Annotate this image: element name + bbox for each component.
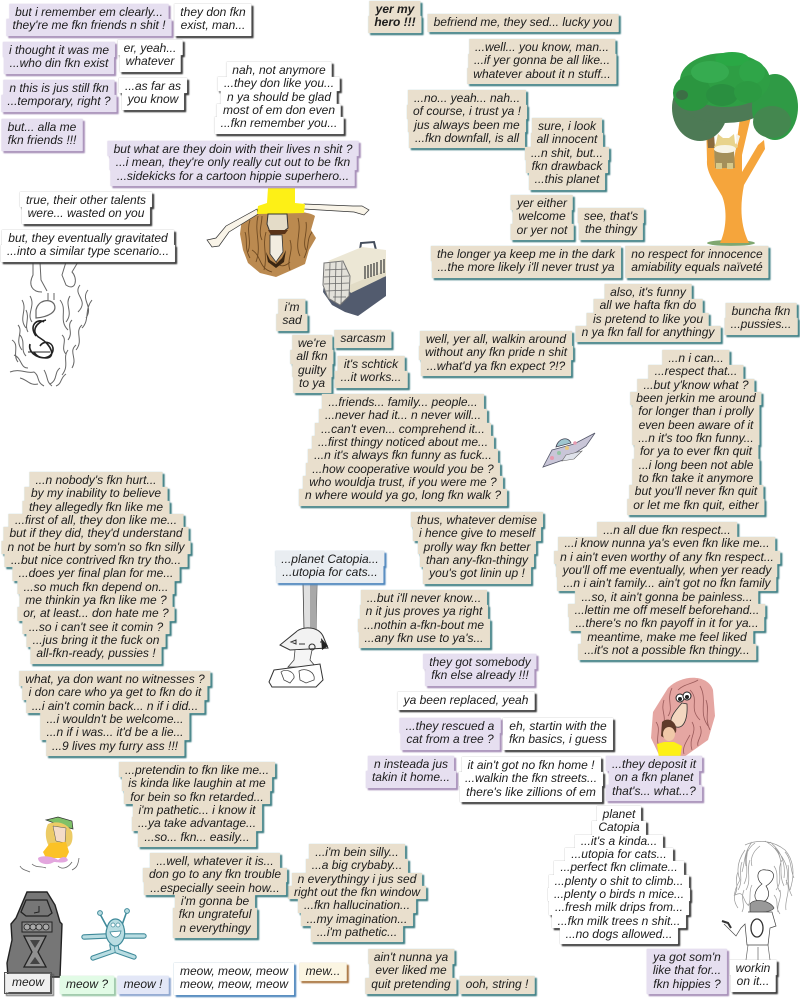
speech: well, whatever it is: fkn ungrateful bbox=[179, 907, 251, 921]
speech: n insteada jus takin it home bbox=[366, 756, 459, 791]
speech: mew: mew... bbox=[306, 964, 340, 978]
speech: but i remember em clearly: they're me fkn friends n shit ! bbox=[12, 18, 166, 32]
speech: friends family people: ...how cooperative would you be ? bbox=[312, 462, 494, 476]
speech: planet Catopia description: ...fkn milk trees n shit... bbox=[558, 914, 680, 928]
speech: n this is jus still fkn: n this is jus still fkn bbox=[9, 81, 109, 95]
speech: it ain't got no fkn home: there's like zillions of em bbox=[466, 785, 596, 799]
speech: true, their other talents: were... wasted on you bbox=[28, 206, 144, 220]
icon: flying saucer bbox=[543, 433, 595, 467]
speech: n nobody's fkn hurt: or, at least... don hate me ? bbox=[23, 606, 169, 620]
speech: n nobody's fkn hurt: ...first of all, they don like me... bbox=[15, 513, 177, 527]
speech: planet Catopia description: Catopia bbox=[598, 820, 640, 834]
speech: well, yer all, walkin around: without any fkn pride n shit bbox=[425, 345, 567, 359]
speech: buncha fkn pussies: buncha fkn bbox=[732, 304, 790, 318]
speech: eh, startin with the basics: fkn basics, i guess bbox=[509, 732, 607, 746]
speech: n i can respect that: ...n i can... bbox=[668, 351, 724, 365]
speech: they deposit it on a planet: on a fkn planet bbox=[615, 770, 693, 784]
speech: workin on it bbox=[730, 962, 776, 992]
speech: buncha fkn pussies: ...pussies... bbox=[731, 317, 791, 331]
speech: well, whatever it is bbox=[143, 855, 287, 938]
speech: see, that's the thingy: the thingy bbox=[585, 222, 637, 236]
speech: well, whatever it is: ...well, whatever it is... bbox=[156, 854, 274, 868]
speech: n i can respect that: ...respect that... bbox=[655, 364, 737, 378]
speech: they deposit it on a planet: that's... what...? bbox=[612, 784, 696, 798]
speech: i'm sad: sad bbox=[282, 313, 302, 327]
speech: buncha fkn pussies bbox=[724, 302, 800, 338]
speech: sure, i look all innocent: fkn drawback bbox=[532, 159, 602, 173]
speech: sure, i look all innocent: all innocent bbox=[537, 132, 597, 146]
speech: the longer ya keep me in the dark: ...the more likely i'll never trust ya bbox=[437, 260, 615, 274]
speech: friends family people: ...never had it... n never will... bbox=[325, 408, 481, 422]
speech: as far as you know: ...as far as bbox=[125, 79, 181, 93]
speech: meow meow meow: meow, meow, meow bbox=[180, 977, 288, 991]
speech: well, whatever it is: don go to any fkn trouble bbox=[149, 867, 281, 881]
speech: n nobody's fkn hurt: all-fkn-ready, pussies ! bbox=[36, 646, 156, 660]
speech: they rescued a cat: cat from a tree ? bbox=[406, 732, 494, 746]
speech: planet Catopia description bbox=[548, 808, 690, 944]
speech: n all due fkn respect: ...it's not a possible fkn thingy... bbox=[584, 643, 750, 657]
icon: signpost with saucer base bbox=[269, 583, 328, 687]
speech: meow outlined: meow bbox=[12, 975, 44, 989]
speech: yer either welcome: or yer not bbox=[517, 223, 567, 237]
speech: pretendin to fkn like me: ...so... fkn... easily... bbox=[144, 830, 250, 844]
speech: nah, not anymore: ...they don like you... bbox=[224, 76, 334, 90]
speech: sure, i look all innocent: sure, i look bbox=[538, 119, 596, 133]
speech: we're all fkn guilty to ya: guilty bbox=[298, 363, 326, 377]
speech: n all due fkn respect: meantime, make me feel liked bbox=[587, 630, 747, 644]
speech: er, yeah whatever bbox=[117, 40, 186, 76]
speech: but i'll never know: ...but i'll never know... bbox=[367, 591, 481, 605]
speech: well you know man: ...if yer gonna be all like... bbox=[474, 53, 610, 67]
speech: well you know man: whatever about it n stuff... bbox=[473, 67, 611, 81]
speech: ain't nunna ya ever liked me: quit pretending bbox=[371, 977, 451, 991]
speech: also, it's funny: all we hafta fkn do bbox=[600, 298, 696, 312]
speech: eh, startin with the basics: eh, startin with the bbox=[509, 719, 607, 733]
speech: also, it's funny: also, it's funny bbox=[610, 285, 686, 299]
speech: but i remember em clearly bbox=[6, 4, 174, 39]
speech: sure, i look all innocent: ...n shit, but... bbox=[531, 146, 603, 160]
speech: we're all fkn guilty to ya: to ya bbox=[299, 376, 325, 390]
speech: nah, not anymore bbox=[214, 62, 347, 138]
speech: but i remember em clearly: but i remember em clearly... bbox=[15, 5, 163, 19]
speech: n all due fkn respect: ...n all due fkn respect... bbox=[603, 523, 731, 537]
speech: workin on it: on it... bbox=[737, 974, 769, 988]
speech: yer either welcome: welcome bbox=[518, 209, 566, 223]
speech: n i can respect that: even been aware of it bbox=[639, 418, 753, 432]
speech: n nobody's fkn hurt: ...so i can't see it comin ? bbox=[29, 620, 163, 634]
speech: well, whatever it is: i'm gonna be bbox=[181, 894, 249, 908]
speech: what, ya don want no witnesses bbox=[18, 670, 214, 760]
speech: pretendin to fkn like me: is kinda like laughin at me bbox=[128, 776, 266, 790]
speech: thus, whatever demise: than any-fkn-thingy bbox=[426, 553, 528, 567]
speech: ain't nunna ya ever liked me bbox=[365, 951, 457, 994]
speech: ya got som'n like that: ya got som'n bbox=[653, 950, 721, 964]
speech: no yeah nah: ...fkn downfall, is all bbox=[415, 131, 519, 145]
speech: ya been replaced, yeah: ya been replaced, yeah bbox=[404, 693, 528, 707]
speech: planet Catopia description: ...utopia for cats... bbox=[571, 847, 667, 861]
speech: i'm sad bbox=[276, 298, 310, 334]
speech: n i can respect that: been jerkin me around bbox=[636, 391, 756, 405]
speech: n insteada jus takin it home: n insteada jus bbox=[374, 757, 448, 771]
speech: meow question: meow ? bbox=[66, 977, 108, 991]
speech: no yeah nah: jus always been me bbox=[414, 118, 520, 132]
speech: they got somebody fkn else bbox=[422, 654, 540, 689]
speech: n nobody's fkn hurt: ...so much fkn depend on... bbox=[24, 580, 168, 594]
speech: n all due fkn respect bbox=[554, 522, 784, 664]
speech: i'm bein silly: ...i'm pathetic... bbox=[317, 925, 397, 939]
speech: n nobody's fkn hurt: ...but nice contrived fkn try tho... bbox=[11, 553, 181, 567]
speech: n nobody's fkn hurt: me thinkin ya fkn like me ? bbox=[25, 593, 167, 607]
speech: yer my hero: yer my bbox=[376, 2, 414, 16]
speech: planet Catopia description: ...plenty o shit to climb... bbox=[555, 874, 683, 888]
speech: they got somebody fkn else: fkn else already !!! bbox=[431, 668, 529, 682]
speech: well, yer all, walkin around: ...what'd ya fkn expect ?!? bbox=[427, 359, 565, 373]
speech: nah, not anymore: ...fkn remember you... bbox=[221, 116, 337, 130]
speech: ain't nunna ya ever liked me: ain't nunna ya bbox=[374, 950, 448, 964]
speech: n all due fkn respect: ...so, it ain't gonna be painless... bbox=[581, 590, 753, 604]
icon: upside-down hippie in yellow shirt bbox=[207, 188, 369, 277]
speech: but i'll never know: n it jus proves ya right bbox=[366, 604, 482, 618]
icon: pink-haired creature with small yellow-shirted kid bbox=[651, 678, 715, 758]
speech: but, they eventually gravitated bbox=[0, 230, 178, 266]
speech: it's schtick bbox=[334, 356, 411, 392]
speech: planet Catopia description: ...fresh milk drips from... bbox=[555, 900, 683, 914]
speech: i'm sad: i'm bbox=[285, 300, 299, 314]
speech: planet Catopia description: ...plenty o birds n mice... bbox=[554, 887, 684, 901]
icon: upside-down sketched figure bbox=[10, 262, 92, 386]
speech: n i can respect that: ...but y'know what ? bbox=[643, 378, 749, 392]
speech: i thought it was me: i thought it was me bbox=[9, 43, 109, 57]
speech: n all due fkn respect: ...lettin me off meself beforehand... bbox=[575, 603, 759, 617]
speech: no respect for innocence bbox=[624, 246, 772, 282]
speech: true, their other talents: true, their other talents bbox=[26, 193, 146, 207]
icon: pet carrier crate bbox=[323, 242, 386, 316]
speech: er, yeah whatever: er, yeah... bbox=[124, 41, 176, 55]
speech: no respect for innocence: no respect for innocence bbox=[631, 247, 763, 261]
speech: n nobody's fkn hurt: but if they did, they'd understand bbox=[9, 526, 183, 540]
speech: they deposit it on a planet bbox=[606, 758, 702, 801]
speech: i'm bein silly: n everythingy i jus sed bbox=[298, 872, 416, 886]
icon: blue alien with spread arms bbox=[84, 909, 144, 958]
speech: befriend me, they sed: befriend me, they sed... lucky you bbox=[434, 15, 612, 29]
speech: also, it's funny: is pretend to like you bbox=[593, 312, 703, 326]
icon: tree with cat bbox=[672, 52, 798, 246]
speech: what, ya don want no witnesses: i don care who ya get to fkn do it bbox=[29, 685, 201, 699]
speech: workin on it: workin bbox=[736, 961, 770, 975]
speech: n nobody's fkn hurt: ...jus bring it the fuck on bbox=[33, 633, 159, 647]
speech: well, whatever it is: n everythingy bbox=[179, 921, 251, 935]
sign: planet Catopia bbox=[274, 550, 388, 586]
speech: nah, not anymore: nah, not anymore bbox=[232, 63, 326, 77]
speech: yer my hero: hero !!! bbox=[374, 15, 416, 29]
speech: sure, i look all innocent bbox=[524, 118, 612, 194]
speech: nah, not anymore: n ya should be glad bbox=[227, 90, 331, 104]
speech: but what are they doin: ...sidekicks for a cartoon hippie superhero... bbox=[117, 169, 349, 183]
speech: it ain't got no fkn home: ...walkin the fkn streets... bbox=[465, 771, 597, 785]
speech: but what are they doin bbox=[107, 140, 362, 189]
speech: n nobody's fkn hurt: they allegedly fkn like me bbox=[29, 500, 163, 514]
speech: n i can respect that: but you'll never fkn quit bbox=[635, 484, 757, 498]
speech: but i'll never know: ...any fkn use to ya's... bbox=[364, 631, 484, 645]
speech: they don fkn exist: they don fkn bbox=[180, 5, 246, 19]
speech: the longer ya keep me in the dark bbox=[430, 246, 624, 282]
speech: but alla me fkn friends: fkn friends !!! bbox=[8, 133, 76, 147]
speech: pretendin to fkn like me: i'm pathetic... i know it bbox=[138, 803, 255, 817]
speech: n i can respect that: ...i long been not able bbox=[639, 458, 753, 472]
speech: pretendin to fkn like me bbox=[119, 764, 275, 847]
speech: they don fkn exist: exist, man... bbox=[181, 18, 245, 32]
speech: also, it's funny: n ya fkn fall for anythingy bbox=[582, 325, 714, 339]
speech: it's schtick: ...it works... bbox=[341, 370, 401, 384]
speech: friends family people: ...can't even... comprehend it... bbox=[321, 422, 485, 436]
speech: friends family people: ...n it's always fkn funny as fuck... bbox=[314, 448, 492, 462]
speech: but i'll never know bbox=[358, 590, 494, 652]
speech: pretendin to fkn like me: for bein so fkn retarded... bbox=[130, 790, 264, 804]
speech: the longer ya keep me in the dark: the longer ya keep me in the dark bbox=[437, 247, 615, 261]
speech: what, ya don want no witnesses: ...n if i was... it'd be a lie... bbox=[46, 725, 184, 739]
speech: no respect for innocence: amiability equals naïveté bbox=[631, 260, 763, 274]
speech: they don fkn exist bbox=[174, 4, 254, 40]
speech: thus, whatever demise: i hence give to meself bbox=[419, 526, 535, 540]
speech: sarcasm: sarcasm bbox=[340, 331, 386, 345]
speech: n i can respect that: to fkn take it anymore bbox=[639, 471, 753, 485]
cat in tree bbox=[714, 134, 740, 169]
speech: also, it's funny bbox=[575, 284, 724, 346]
speech: n all due fkn respect: n i ain't even worthy of any fkn respect... bbox=[560, 550, 774, 564]
speech: n i can respect that: for ya to ever fkn quit bbox=[640, 444, 752, 458]
speech: i thought it was me bbox=[2, 42, 118, 77]
speech: n nobody's fkn hurt: n not be hurt by som'n so fkn silly bbox=[7, 540, 185, 554]
speech: planet Catopia description: planet bbox=[603, 807, 635, 821]
speech: thus, whatever demise: prolly way fkn better bbox=[424, 540, 530, 554]
speech: n i can respect that: for longer than i prolly bbox=[638, 404, 754, 418]
speech: planet Catopia description: ...perfect fkn climate... bbox=[560, 860, 678, 874]
speech: n all due fkn respect: ...i know nunna ya's even fkn like me... bbox=[564, 536, 770, 550]
speech: we're all fkn guilty to ya: all fkn bbox=[296, 349, 328, 363]
speech: meow meow meow bbox=[174, 965, 294, 995]
speech: see, that's the thingy: see, that's bbox=[584, 209, 638, 223]
speech: no yeah nah bbox=[406, 90, 530, 152]
sign: planet Catopia: ...utopia for cats... bbox=[282, 565, 378, 579]
speech: i'm bein silly: ...a big crybaby... bbox=[312, 858, 402, 872]
speech: i'm bein silly: ...i'm bein silly... bbox=[315, 845, 399, 859]
speech: we're all fkn guilty to ya bbox=[290, 334, 336, 396]
speech: er, yeah whatever: whatever bbox=[126, 54, 174, 68]
speech: but alla me fkn friends bbox=[1, 118, 86, 154]
speech: nah, not anymore: most of em don even bbox=[223, 103, 335, 117]
speech: n i can respect that bbox=[626, 350, 768, 518]
speech: well, whatever it is: ...especially seein how... bbox=[150, 881, 280, 895]
speech: planet Catopia description: ...it's a kinda... bbox=[581, 834, 657, 848]
speech: i'm bein silly: right out the fkn window bbox=[294, 885, 420, 899]
icon: sketched wild-haired hippie bbox=[722, 841, 794, 960]
speech: i'm bein silly: ...fkn hallucination... bbox=[304, 898, 410, 912]
speech: friends family people: ...first thingy noticed about me... bbox=[318, 435, 488, 449]
speech: as far as you know: you know bbox=[128, 92, 178, 106]
speech: we're all fkn guilty to ya: we're bbox=[298, 336, 326, 350]
speech: yer either welcome bbox=[510, 194, 577, 244]
speech: n insteada jus takin it home: takin it home... bbox=[372, 770, 450, 784]
speech: n nobody's fkn hurt: ...n nobody's fkn hurt... bbox=[35, 473, 157, 487]
speech: it ain't got no fkn home bbox=[459, 759, 603, 802]
speech: but, they eventually gravitated: but, they eventually gravitated bbox=[8, 231, 168, 245]
speech: but what are they doin: but what are they doin with their lives n shit ? bbox=[114, 142, 352, 156]
sign: planet Catopia: ...planet Catopia... bbox=[281, 552, 379, 566]
speech: it's schtick: it's schtick bbox=[344, 357, 398, 371]
speech: n nobody's fkn hurt: by my inability to believe bbox=[31, 486, 161, 500]
speech: ya got som'n like that: like that for... bbox=[653, 963, 721, 977]
speech: as far as you know bbox=[118, 78, 190, 114]
speech: they got somebody fkn else: they got somebody bbox=[429, 655, 531, 669]
speech: i'm bein silly bbox=[288, 846, 426, 942]
speech: n this is jus still fkn bbox=[1, 80, 120, 115]
speech: well you know man: ...well... you know, man... bbox=[475, 40, 609, 54]
speech: but alla me fkn friends: but... alla me bbox=[8, 120, 76, 134]
speech: ooh, string: ooh, string ! bbox=[466, 977, 528, 991]
speech: pretendin to fkn like me: ...pretendin to fkn like me... bbox=[125, 763, 269, 777]
speech: well you know man bbox=[466, 38, 620, 88]
speech: friends family people bbox=[298, 393, 510, 510]
speech: n this is jus still fkn: ...temporary, right ? bbox=[7, 94, 111, 108]
speech: n nobody's fkn hurt bbox=[1, 472, 194, 668]
speech: n i can respect that: or let me fkn quit, either bbox=[633, 498, 759, 512]
speech: thus, whatever demise bbox=[410, 512, 546, 588]
speech: what, ya don want no witnesses: ...i wouldn't be welcome... bbox=[46, 712, 184, 726]
speech: n all due fkn respect: you'll off me eventually, when yer ready bbox=[563, 563, 771, 577]
speech: n i can respect that: ...n it's too fkn funny... bbox=[638, 431, 754, 445]
speech: yer my hero bbox=[368, 0, 424, 36]
speech: friends family people: ...friends... family... people... bbox=[328, 395, 478, 409]
speech: what, ya don want no witnesses: ...i ain't comin back... n if i did... bbox=[32, 699, 198, 713]
speech: well, yer all, walkin around: well, yer all, walkin around bbox=[426, 332, 566, 346]
speech: friends family people: n where would ya go, long fkn walk ? bbox=[305, 488, 501, 502]
speech: sure, i look all innocent: ...this planet bbox=[535, 172, 599, 186]
speech: see, that's the thingy bbox=[577, 208, 647, 244]
speech: ya got som'n like that: fkn hippies ? bbox=[653, 977, 721, 991]
speech: n nobody's fkn hurt: ...does yer final plan for me... bbox=[19, 566, 173, 580]
speech: thus, whatever demise: thus, whatever demise bbox=[417, 513, 537, 527]
speech: no yeah nah: of course, i trust ya ! bbox=[413, 104, 521, 118]
speech: meow meow meow: meow, meow, meow bbox=[180, 964, 288, 978]
speech: no yeah nah: ...no... yeah... nah... bbox=[414, 91, 520, 105]
speech: what, ya don want no witnesses: what, ya don want no witnesses ? bbox=[25, 672, 205, 686]
speech: planet Catopia description: ...no dogs allowed... bbox=[566, 927, 672, 941]
speech: true, their other talents bbox=[19, 192, 156, 228]
speech: i'm bein silly: ...my imagination... bbox=[307, 912, 407, 926]
speech: i thought it was me: ...who din fkn exist bbox=[10, 56, 108, 70]
speech: but, they eventually gravitated: ...into a similar type scenario... bbox=[7, 244, 169, 258]
speech: ya got som'n like that bbox=[647, 951, 727, 994]
speech: yer either welcome: yer either bbox=[517, 196, 567, 210]
speech: it ain't got no fkn home: it ain't got no fkn home ! bbox=[467, 758, 595, 772]
speech: what, ya don want no witnesses: ...9 lives my furry ass !!! bbox=[52, 739, 178, 753]
icon: kid in cap sitting cross-legged bbox=[20, 817, 79, 872]
speech: ain't nunna ya ever liked me: ever liked me bbox=[375, 963, 447, 977]
speech: pretendin to fkn like me: ...ya take advantage... bbox=[138, 816, 256, 830]
icon: grey stone robot statue bbox=[7, 892, 62, 977]
speech: friends family people: who wouldja trust, if you were me ? bbox=[309, 475, 497, 489]
speech: meow exclamation: meow ! bbox=[124, 977, 162, 991]
speech: they rescued a cat bbox=[399, 718, 503, 753]
speech: n all due fkn respect: ...there's no fkn payoff in it for ya... bbox=[575, 616, 759, 630]
speech: they deposit it on a planet: ...they deposit it bbox=[612, 757, 696, 771]
speech: well, yer all, walkin around bbox=[418, 330, 576, 380]
speech: eh, startin with the basics bbox=[502, 718, 616, 754]
speech: they rescued a cat: ...they rescued a bbox=[406, 719, 494, 733]
speech: n all due fkn respect: ...n i ain't family... ain't got no fkn family bbox=[563, 576, 771, 590]
speech: thus, whatever demise: you's got linin up ! bbox=[429, 566, 525, 580]
speech: but i'll never know: ...nothin a-fkn-bout me bbox=[364, 618, 484, 632]
speech: but what are they doin: ...i mean, they're only really cut out to be fkn bbox=[116, 155, 350, 169]
